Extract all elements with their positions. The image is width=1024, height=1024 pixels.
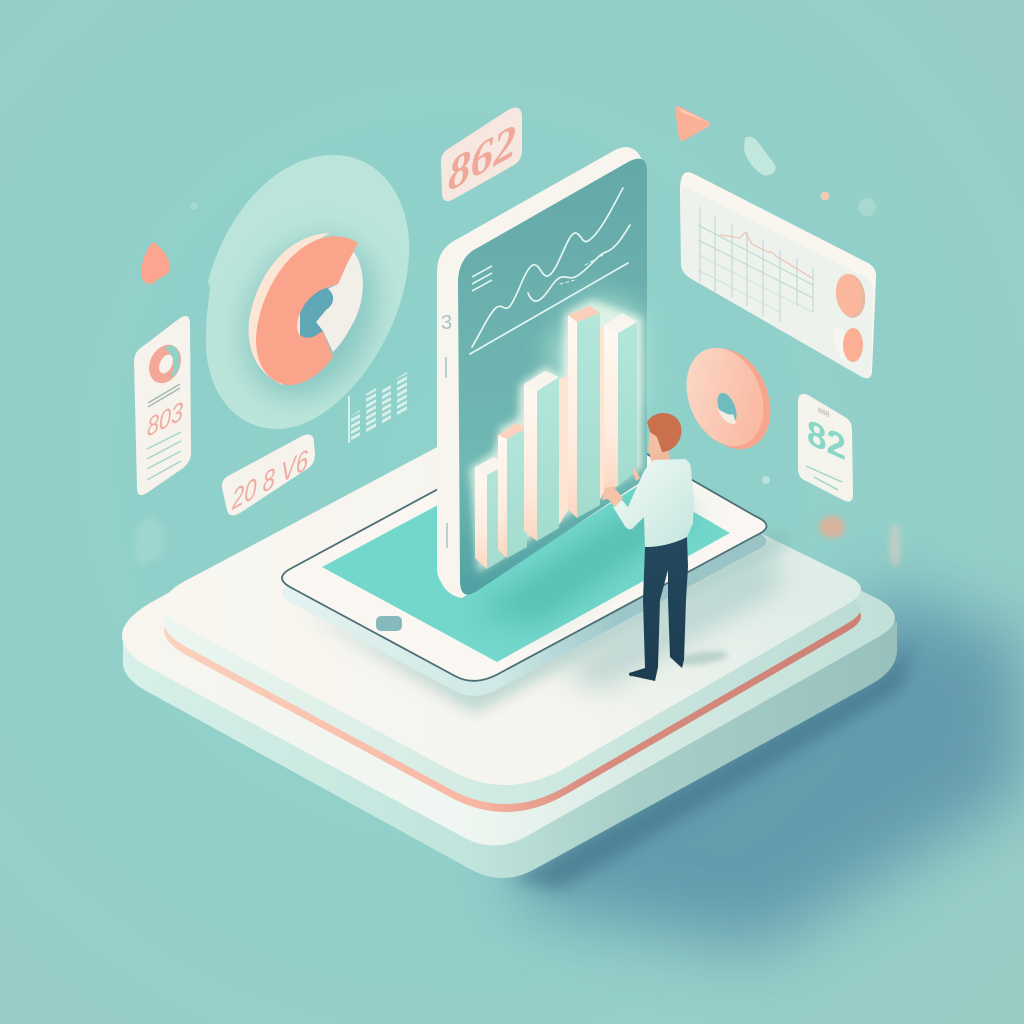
- base top: [122, 520, 895, 846]
- calendar button bottom: [834, 327, 863, 362]
- platform: salmon stripe: [164, 442, 861, 812]
- donut white slice: [316, 250, 363, 352]
- person shadow: [675, 648, 729, 668]
- calendar trend: [720, 232, 812, 278]
- menu icon: [472, 266, 492, 291]
- info card left: [134, 316, 191, 495]
- person: [602, 413, 694, 681]
- tablet home button: [376, 616, 402, 631]
- phone frame: [437, 147, 647, 598]
- tablet side: [282, 429, 766, 696]
- bar 3: [524, 371, 559, 541]
- tablet shadow: [300, 530, 790, 712]
- side mark text: 3: [441, 312, 452, 334]
- value text: 862: [448, 113, 516, 202]
- donut rim: [248, 233, 330, 385]
- base side: [123, 622, 897, 878]
- card lines: [806, 466, 842, 490]
- pie backdrop disc: [206, 155, 409, 429]
- phone shadow on tablet: [472, 495, 700, 625]
- peach ring disc: [673, 336, 785, 461]
- bar 4: [559, 306, 600, 525]
- value card 862: [441, 108, 522, 202]
- card number: 82: [807, 412, 846, 468]
- year label card: [222, 435, 315, 517]
- platform: base layer: [122, 520, 897, 878]
- tablet: [282, 414, 766, 696]
- person: hand: [602, 486, 623, 507]
- calendar panel: [680, 172, 876, 378]
- value card 82: [798, 394, 853, 502]
- card caption lines: [148, 384, 180, 407]
- faint shape lower left: [134, 515, 165, 566]
- floating pill: [744, 137, 776, 175]
- donut hole: [280, 276, 344, 348]
- faint floaters right: [762, 476, 901, 567]
- mini bar chart: [349, 372, 407, 443]
- donut chart: [248, 233, 363, 385]
- person: neck: [649, 448, 670, 466]
- line chart: [470, 188, 630, 354]
- phone: [437, 147, 647, 598]
- year label text: 20 8 V6: [231, 444, 308, 517]
- phone side marks: [446, 357, 447, 548]
- card text lines: [147, 432, 181, 480]
- card header: 888: [818, 405, 830, 419]
- card number: 803: [147, 395, 184, 443]
- calendar grid: [698, 207, 813, 322]
- person: trousers: [629, 537, 688, 681]
- bar 5: [600, 313, 637, 500]
- bar 2: [498, 423, 527, 558]
- tablet screen: [322, 437, 730, 662]
- platform: white layer: [164, 415, 861, 804]
- person: shirt: [613, 459, 694, 547]
- phone screen: [458, 159, 647, 595]
- pie shadow: [218, 216, 402, 420]
- platform shadow: [510, 590, 1024, 950]
- faint dot left: [190, 202, 198, 210]
- triangle icon: [676, 107, 710, 138]
- glow behind bars: [470, 295, 644, 572]
- tablet face: [282, 414, 766, 681]
- person: back hand: [633, 465, 640, 481]
- small peach drop: [141, 242, 170, 284]
- person: hair: [647, 413, 681, 452]
- card donut icon: [143, 340, 187, 388]
- calendar button top: [833, 272, 868, 320]
- bar 1: [475, 457, 505, 569]
- person: face: [648, 430, 662, 455]
- donut salmon slice: [256, 236, 358, 385]
- floating dots: [820, 192, 876, 216]
